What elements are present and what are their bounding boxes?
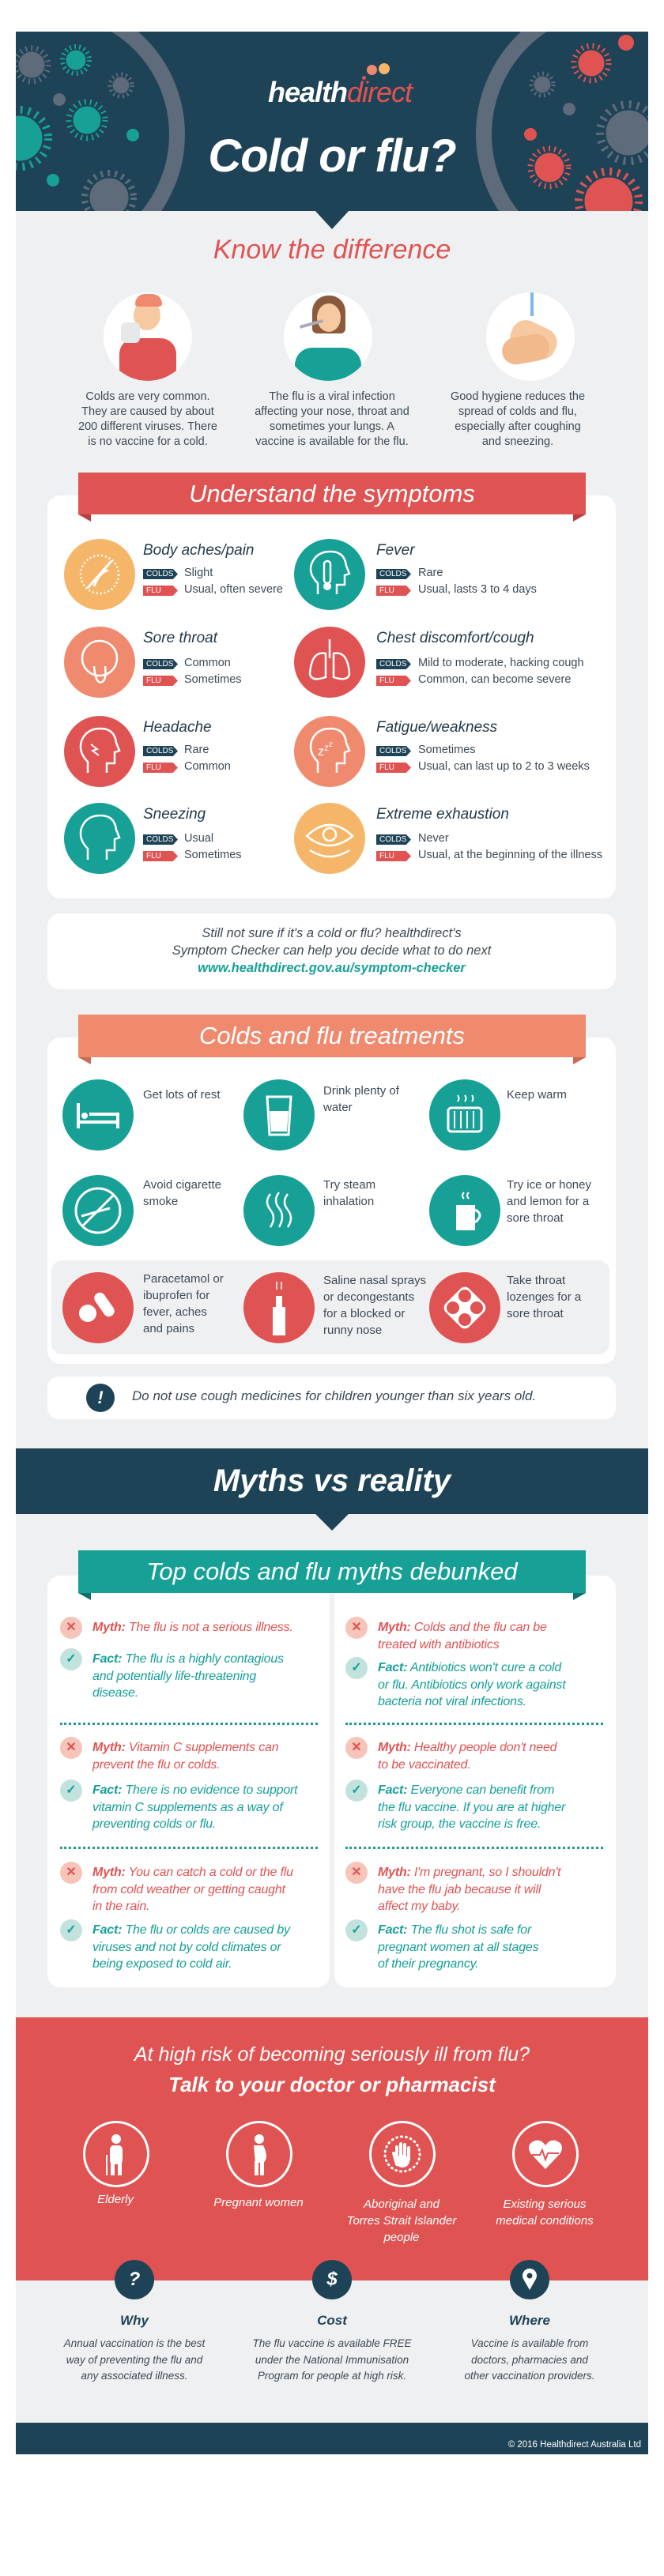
heading: top myths xyxy=(78,1550,586,1600)
treatment: lozenges xyxy=(429,1272,582,1343)
myth 1: Myth: The flu is not a serious illness. xyxy=(92,1621,293,1634)
myth 3: viruses and not by cold climates or xyxy=(92,1941,281,1953)
symptom: fatigue: COLDS xyxy=(379,747,406,755)
symptom: exhaustion: FLU xyxy=(379,852,394,861)
symptom: chest: Mild to moderate, hacking cough xyxy=(418,657,584,669)
symptom: sneezing: Sometimes xyxy=(184,849,242,861)
callout: symptom checker: Still not sure if it's a cold or flu? healthdirect's xyxy=(202,926,462,940)
symptom: fatigue: Usual, can last up to 2 to 3 weeks xyxy=(418,760,590,773)
myth 1: ✓ xyxy=(66,1652,77,1666)
myth 4: bacteria not viral infections. xyxy=(378,1695,526,1708)
symptom: headache: Common xyxy=(184,760,231,773)
myth 5: the flu vaccine. If you are at higher xyxy=(378,1800,565,1814)
myth 3: ✓ xyxy=(66,1923,77,1937)
text: colds common: Colds are very common. They are caused by about 200 different viruses. There is no vaccine for a cold. xyxy=(78,390,217,448)
symptom: body aches: Body aches/pain xyxy=(143,542,255,559)
treatment: honey lemon: Try ice or honey and lemon for a sore throat xyxy=(507,1178,591,1225)
treatment: steam xyxy=(243,1175,375,1246)
symptom: headache: FLU xyxy=(146,763,161,772)
myth 1: Fact: The flu is a highly contagious xyxy=(92,1652,284,1666)
myth 6: ✓ xyxy=(351,1923,362,1937)
myth 6 xyxy=(345,1862,561,1971)
treatment: rest: Get lots of rest xyxy=(143,1088,221,1102)
symptom: fever: COLDS xyxy=(379,570,406,578)
symptom: fever: Usual, lasts 3 to 4 days xyxy=(418,583,537,596)
myth 6: pregnant women at all stages xyxy=(378,1941,538,1953)
info: where: Vaccine is available from xyxy=(471,2337,588,2349)
myth 3 xyxy=(60,1862,293,1971)
myth 3: ✕ xyxy=(66,1866,77,1879)
symptom: body aches xyxy=(64,539,283,610)
info: cost: Program for people at high risk. xyxy=(258,2370,406,2382)
heading: high risk xyxy=(133,2043,530,2096)
symptom: sneezing: Sneezing xyxy=(143,806,206,823)
symptom: sore throat: Sometimes xyxy=(184,673,242,686)
footer xyxy=(16,2423,648,2454)
symptom: chest: COLDS xyxy=(379,660,406,668)
treatment: lozenges: Take throat lozenges for a sore throat xyxy=(507,1274,581,1320)
symptom: fever xyxy=(294,539,537,610)
heading: understand the symptoms: Understand the symptoms xyxy=(189,480,475,507)
treatment: nasal spray xyxy=(243,1272,426,1343)
arrow: header pointer xyxy=(315,210,349,229)
myth 2: Myth: Vitamin C supplements can xyxy=(92,1741,278,1754)
treatment: paracetamol: Paracetamol or ibuprofen for fever, aches and pains xyxy=(143,1272,224,1335)
panel: high risk xyxy=(16,2017,648,2280)
myth 6: ✕ xyxy=(351,1866,362,1879)
myth 5: Fact: Everyone can benefit from xyxy=(378,1783,554,1797)
icon: exclamation: ! xyxy=(97,1388,104,1407)
panel: know the difference xyxy=(78,292,585,448)
heading: know the difference: Know the difference xyxy=(213,235,451,265)
myth 5 xyxy=(345,1737,566,1831)
myth 6: Fact: The flu shot is safe for xyxy=(378,1923,531,1937)
symptom: fatigue: Fatigue/weakness xyxy=(376,719,497,736)
callout: warning: Do not use cough medicines for children younger than six years old. xyxy=(132,1388,536,1403)
symptom: sore throat xyxy=(64,627,242,698)
myth 2: Fact: There is no evidence to support xyxy=(92,1783,297,1797)
info: why xyxy=(63,2260,206,2382)
symptom: fatigue xyxy=(294,716,590,787)
symptom: body aches: Usual, often severe xyxy=(184,583,283,596)
symptom: chest: Chest discomfort/cough xyxy=(376,630,534,646)
myth 5: risk group, the vaccine is free. xyxy=(378,1817,541,1831)
myth 3: Fact: The flu or colds are caused by xyxy=(92,1923,290,1937)
panel: symptoms xyxy=(47,495,616,898)
icon: hand washing xyxy=(486,292,575,381)
text: hygiene: Good hygiene reduces the spread of colds and flu, especially after coughing and sneezing. xyxy=(451,390,585,448)
myth 3: from cold weather or getting caught xyxy=(92,1882,285,1896)
icon: pregnant xyxy=(226,2121,292,2187)
info: cost: The flu vaccine is available FREE xyxy=(252,2337,412,2349)
treatment: smoke xyxy=(62,1175,221,1246)
label: existing conditions: Existing serious medical conditions xyxy=(496,2198,594,2228)
symptom: fatigue: z xyxy=(318,745,324,759)
info: why: ? xyxy=(129,2269,140,2290)
logo: healthdirect xyxy=(268,76,412,108)
treatment: warm: Keep warm xyxy=(507,1088,567,1102)
info: where: other vaccination providers. xyxy=(464,2370,595,2382)
symptom: exhaustion: Usual, at the beginning of the illness xyxy=(418,849,602,861)
myth 4: Fact: Antibiotics won't cure a cold xyxy=(378,1661,561,1674)
arrow: myths pointer xyxy=(315,1513,349,1531)
myth 1: and potentially life-threatening xyxy=(92,1669,256,1683)
label: aboriginal: Aboriginal and Torres Strait Islander people xyxy=(347,2198,456,2244)
myth 1: ✕ xyxy=(66,1621,77,1634)
treatment: paracetamol xyxy=(62,1272,224,1343)
callout: symptom checker: www.healthdirect.gov.au/symptom-checker xyxy=(198,961,466,975)
symptom: fatigue: z xyxy=(329,740,333,749)
heading: understand the symptoms xyxy=(78,473,586,522)
myth 4: ✓ xyxy=(351,1661,362,1674)
heading: top myths: Top colds and flu myths debunked xyxy=(146,1557,518,1585)
myth 5: to be vaccinated. xyxy=(378,1757,471,1772)
heading: treatments xyxy=(78,1015,586,1064)
symptom: chest: Common, can become severe xyxy=(418,673,571,686)
sub-panel: medicines xyxy=(51,1260,609,1354)
symptom: chest: FLU xyxy=(379,676,394,685)
symptom: sneezing: COLDS xyxy=(146,835,173,844)
myth 6: have the flu jab because it will xyxy=(378,1882,541,1896)
myth 6: of their pregnancy. xyxy=(378,1957,479,1971)
info: why: any associated illness. xyxy=(81,2370,188,2382)
panel: myths left xyxy=(47,1576,330,1987)
info: where xyxy=(464,2260,595,2382)
treatment: water: Drink plenty of water xyxy=(323,1084,399,1114)
myth 4: treated with antibiotics xyxy=(378,1637,500,1651)
treatment: water xyxy=(243,1079,399,1151)
myth 2 xyxy=(60,1737,299,1831)
myth 1: disease. xyxy=(92,1686,138,1700)
symptom: fever: Rare xyxy=(418,567,443,579)
treatment: rest xyxy=(62,1079,221,1151)
treatment: warm xyxy=(429,1079,567,1151)
symptom: body aches: FLU xyxy=(146,586,161,595)
symptom: fever: Fever xyxy=(376,542,415,559)
treatment: smoke: Avoid cigarette smoke xyxy=(143,1178,221,1208)
symptom: sore throat: FLU xyxy=(146,676,161,685)
myth 5: Myth: Healthy people don't need xyxy=(378,1741,556,1754)
myth 4: Myth: Colds and the flu can be xyxy=(378,1621,547,1634)
myth 4: ✕ xyxy=(351,1621,362,1634)
info: cost: under the National Immunisation xyxy=(255,2353,409,2366)
myth 3: in the rain. xyxy=(92,1900,149,1913)
myth 3: being exposed to cold air. xyxy=(92,1957,232,1971)
symptom: fatigue: FLU xyxy=(379,763,394,772)
symptom: headache xyxy=(64,716,231,787)
myth 2: ✓ xyxy=(66,1783,77,1797)
heading: high risk: At high risk of becoming seriously ill from flu? xyxy=(134,2043,530,2066)
symptom: headache: COLDS xyxy=(146,747,173,755)
treatment: nasal spray: Saline nasal sprays or decongestants for a blocked or runny nose xyxy=(323,1274,426,1337)
main title: Cold or flu? xyxy=(208,130,456,182)
info: cost xyxy=(252,2260,412,2382)
symptom: sneezing: FLU xyxy=(146,852,161,861)
symptom: headache: Headache xyxy=(143,719,212,736)
myth 4 xyxy=(345,1617,566,1708)
myth 2: ✕ xyxy=(66,1741,77,1754)
label: elderly: Elderly xyxy=(97,2193,134,2206)
info: where: Where xyxy=(509,2313,550,2328)
callout: warning xyxy=(47,1377,616,1419)
icon: hand xyxy=(369,2121,436,2187)
info: cost: $ xyxy=(326,2269,338,2290)
symptom: exhaustion: Never xyxy=(418,832,449,845)
info: why: way of preventing the flu and xyxy=(66,2353,202,2366)
symptom: exhaustion: Extreme exhaustion xyxy=(376,806,509,823)
myth 2: preventing colds or flu. xyxy=(92,1817,216,1831)
symptom: exhaustion xyxy=(294,803,602,874)
info: why: Why xyxy=(120,2313,149,2328)
icon: elderly xyxy=(83,2121,149,2187)
icon: exclamation xyxy=(86,1384,115,1412)
panel: myths right xyxy=(334,1576,616,1987)
myth 6: affect my baby. xyxy=(378,1900,460,1913)
symptom: sore throat: Sore throat xyxy=(143,630,217,646)
myth 3: Myth: You can catch a cold or the flu xyxy=(92,1866,293,1879)
myth 2: prevent the flu or colds. xyxy=(92,1757,220,1772)
treatment: steam: Try steam inhalation xyxy=(323,1178,375,1208)
callout: symptom checker xyxy=(47,913,616,989)
label: pregnant: Pregnant women xyxy=(213,2196,304,2209)
symptom: headache: Rare xyxy=(184,744,209,756)
myth 5: ✓ xyxy=(351,1783,362,1797)
myth 6: Myth: I'm pregnant, so I shouldn't xyxy=(378,1866,560,1879)
heading: treatments: Colds and flu treatments xyxy=(199,1022,465,1049)
icon: man sneezing xyxy=(104,292,192,381)
symptom: sneezing xyxy=(64,803,242,874)
info: where: doctors, pharmacies and xyxy=(471,2353,588,2366)
symptom: chest xyxy=(294,627,584,698)
symptom: sneezing: Usual xyxy=(184,832,213,845)
symptom: sore throat: Common xyxy=(184,657,231,669)
symptom: body aches: COLDS xyxy=(146,570,173,578)
icon: heart xyxy=(512,2121,579,2187)
info: cost: Cost xyxy=(317,2313,347,2328)
callout: symptom checker: Symptom Checker can help you decide what to do next xyxy=(172,943,491,958)
footer: © 2016 Healthdirect Australia Ltd xyxy=(508,2440,641,2450)
heading: high risk: Talk to your doctor or pharmacist xyxy=(168,2073,496,2096)
symptom: sore throat: COLDS xyxy=(146,660,173,668)
panel: treatments xyxy=(47,1038,616,1364)
header banner xyxy=(16,32,648,211)
symptom: exhaustion: COLDS xyxy=(379,835,406,844)
treatment: honey lemon xyxy=(429,1175,591,1246)
myth 1 xyxy=(60,1617,293,1700)
myth 5: ✕ xyxy=(351,1741,362,1754)
symptom: fever: FLU xyxy=(379,586,394,595)
symptom: fatigue: z xyxy=(324,742,329,753)
symptom: fatigue: Sometimes xyxy=(418,744,476,756)
heading: myths vs reality: Myths vs reality xyxy=(213,1463,451,1498)
myth 4: or flu. Antibiotics only work against xyxy=(378,1678,565,1691)
myth 2: vitamin C supplements as a way of xyxy=(92,1800,283,1814)
heading: myths vs reality xyxy=(16,1448,648,1514)
info: why: Annual vaccination is the best xyxy=(64,2337,205,2349)
text: flu viral: The flu is a viral infection affecting your nose, throat and sometimes your lungs. A vaccine is available for the flu. xyxy=(255,390,409,448)
symptom: body aches: Slight xyxy=(184,567,213,579)
icon: woman with thermometer xyxy=(284,292,372,381)
